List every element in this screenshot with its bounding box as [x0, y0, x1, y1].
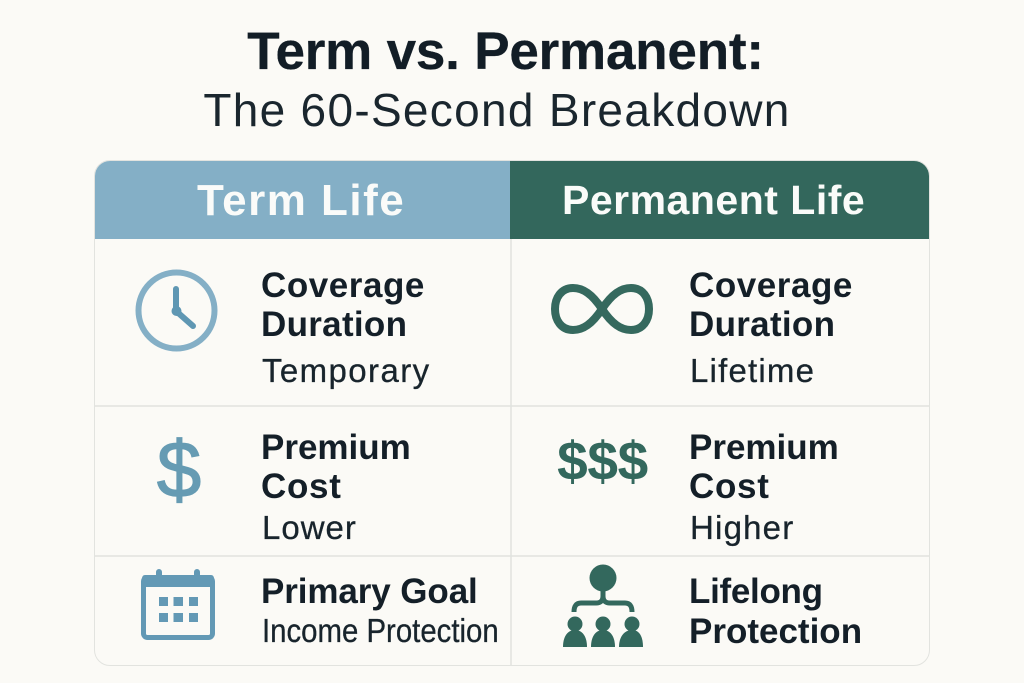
- label: Cost: [689, 467, 770, 506]
- header: term life: Term Life: [197, 176, 405, 225]
- label: [689, 266, 853, 344]
- label: Lifelong: [689, 572, 823, 611]
- title: Term vs. Permanent:: [247, 22, 764, 81]
- label: Primary Goal: [261, 572, 478, 611]
- label: [261, 428, 411, 506]
- text: term premium cost: [261, 428, 411, 546]
- value: Temporary: [262, 352, 430, 389]
- label: Premium: [689, 428, 839, 467]
- text: permanent primary goal: [689, 572, 862, 651]
- header: permanent life: [510, 160, 931, 239]
- icon: clock: [136, 270, 218, 352]
- text: term primary goal: [261, 572, 499, 649]
- icon: family tree: [563, 564, 643, 647]
- value: Lifetime: [690, 352, 815, 389]
- label: Duration: [689, 305, 835, 344]
- icon: infinity: [551, 284, 653, 334]
- label: [689, 572, 862, 651]
- label: Duration: [261, 305, 407, 344]
- value: Higher: [690, 509, 794, 546]
- label: [689, 428, 839, 506]
- icon: calendar: [141, 569, 215, 640]
- icon: three dollars: $$$: [557, 430, 648, 492]
- value: Lower: [262, 509, 357, 546]
- label: Coverage: [261, 266, 425, 305]
- icon: dollar: $: [157, 425, 201, 514]
- value: Income Protection: [262, 612, 499, 649]
- header: permanent life: Permanent Life: [562, 177, 865, 223]
- label: Premium: [261, 428, 411, 467]
- label: Cost: [261, 467, 342, 506]
- subtitle: The 60-Second Breakdown: [203, 84, 791, 136]
- text: term coverage duration: [261, 266, 430, 390]
- text: permanent premium cost: [689, 428, 839, 546]
- text: permanent coverage duration: [689, 266, 853, 389]
- label: [261, 266, 425, 344]
- header: term life: [94, 160, 510, 239]
- label: Protection: [689, 612, 862, 651]
- label: Coverage: [689, 266, 853, 305]
- comparison table: [94, 160, 930, 666]
